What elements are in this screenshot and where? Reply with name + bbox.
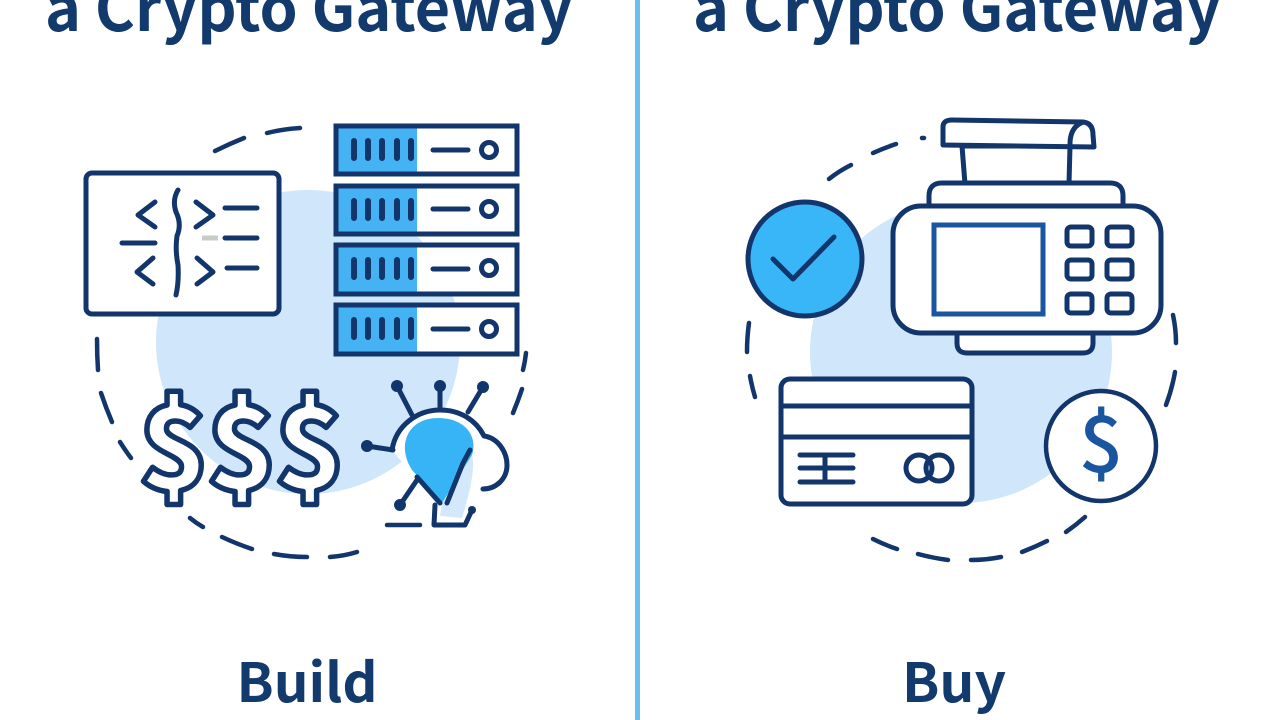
terminal tray xyxy=(957,333,1093,353)
icon: payment terminal xyxy=(893,120,1161,353)
icon: credit card xyxy=(781,379,972,504)
background circle xyxy=(810,201,1112,503)
icon: check badge xyxy=(748,202,862,316)
icon: dollar coin: $ xyxy=(1079,383,1123,495)
icon: code window xyxy=(86,173,279,314)
dashed ring xyxy=(747,138,1176,560)
dashed ring xyxy=(97,128,526,557)
keypad xyxy=(1067,227,1132,313)
terminal top xyxy=(929,183,1123,206)
icon: server stack xyxy=(336,126,517,354)
terminal body xyxy=(893,206,1161,333)
server 2 xyxy=(336,186,517,234)
server 4 xyxy=(336,305,517,354)
background circle xyxy=(156,190,460,494)
server 1 xyxy=(336,126,517,174)
icon: light bulb network xyxy=(361,380,507,525)
icon: three dollar signs xyxy=(139,356,345,524)
panel: build illustration xyxy=(86,126,526,557)
icon: three dollar signs: $ xyxy=(275,356,345,524)
receipt paper xyxy=(962,146,1070,184)
icon: three dollar signs: $ xyxy=(207,356,277,524)
icon: dollar coin xyxy=(1046,383,1156,501)
right label: Buy: Buy xyxy=(902,639,1006,718)
icon: three dollar signs: $ xyxy=(139,356,209,524)
divider line xyxy=(635,0,640,720)
panel: buy illustration xyxy=(747,120,1176,560)
left label: Build: Build xyxy=(236,639,378,718)
server 3 xyxy=(336,245,517,294)
terminal screen xyxy=(934,225,1043,314)
